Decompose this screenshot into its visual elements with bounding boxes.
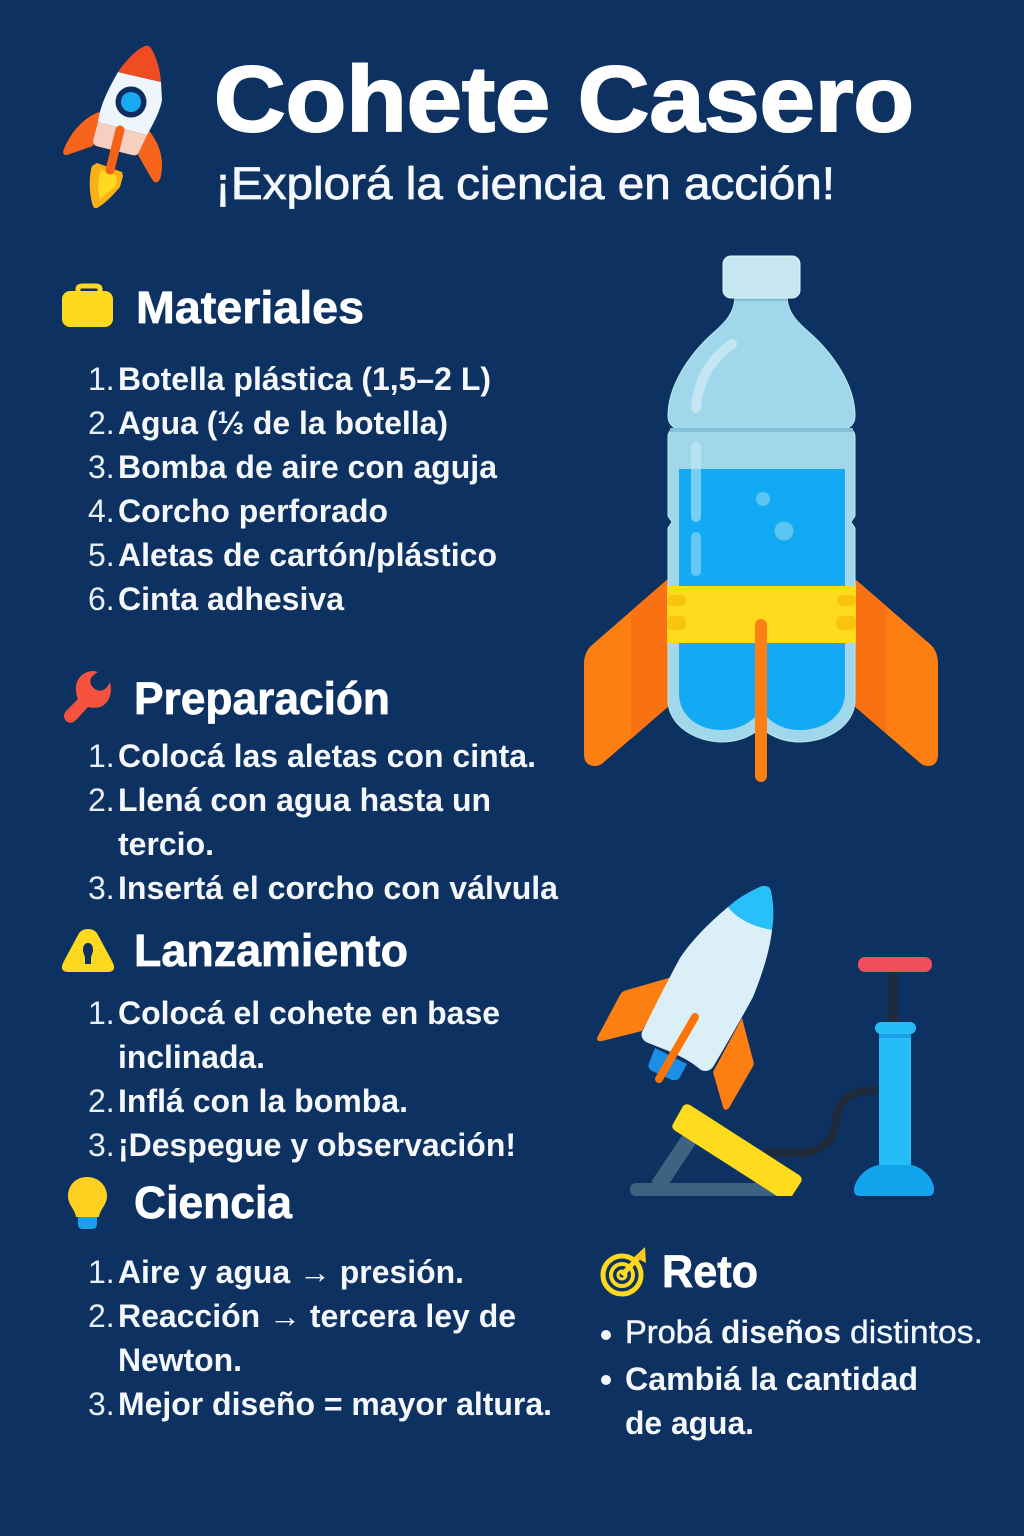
rocket nose [728, 886, 773, 930]
list: preparación: tercio. [118, 826, 214, 862]
list: materiales: Corcho perforado [118, 493, 388, 529]
list: materiales: Agua (⅓ de la botella) [118, 405, 448, 441]
subtitle: ¡Explorá la ciencia en acción! [215, 158, 835, 209]
list: preparación: Colocá las aletas con cinta. [118, 738, 536, 774]
list: preparación: 1. [88, 738, 115, 774]
list: lanzamiento: ¡Despegue y observación! [118, 1127, 516, 1163]
icon: wrench [64, 671, 111, 723]
list: materiales: Botella plástica (1,5–2 L) [118, 361, 491, 397]
icon: header rocket [63, 46, 162, 208]
list: preparación [88, 738, 558, 906]
air hose [765, 1090, 878, 1153]
list: materiales: 6. [88, 581, 115, 617]
rocket rod [659, 1017, 695, 1079]
list: reto: Probá [625, 1314, 712, 1350]
stand [630, 1138, 782, 1196]
rocket body [642, 907, 772, 1071]
list: materiales: 1. [88, 361, 115, 397]
list: lanzamiento: 2. [88, 1083, 115, 1119]
bubbles [756, 492, 794, 540]
heading: Ciencia: Ciencia [134, 1177, 293, 1228]
list: materiales: Aletas de cartón/plástico [118, 537, 497, 573]
yellow tape [667, 586, 856, 643]
list: materiales: 4. [88, 493, 115, 529]
list: lanzamiento: 1. [88, 995, 115, 1031]
right fin [853, 579, 938, 766]
list: ciencia: Aire y agua → presión. [118, 1254, 464, 1290]
launch ramp [672, 1104, 802, 1196]
illustration: bottle rocket [584, 256, 938, 782]
list: reto: diseños [721, 1314, 841, 1350]
rocket fins and nozzle [597, 977, 754, 1110]
list: materiales: Cinta adhesiva [118, 581, 344, 617]
list: preparación: 3. [88, 870, 115, 906]
list: ciencia: 1. [88, 1254, 115, 1290]
list: ciencia: Newton. [118, 1342, 242, 1378]
list: ciencia: 2. [88, 1298, 115, 1334]
list: materiales [88, 361, 497, 617]
list: reto [601, 1314, 983, 1441]
icon: light bulb [68, 1177, 107, 1229]
pump [854, 957, 934, 1196]
heading: Preparación: Preparación [134, 673, 390, 724]
list: materiales: Bomba de aire con aguja [118, 449, 497, 485]
water [679, 469, 845, 730]
list: lanzamiento [88, 995, 516, 1163]
launch rod [755, 619, 767, 782]
bottle cap [723, 256, 800, 298]
list: preparación: Llená con agua hasta un [118, 782, 491, 818]
heading: Reto: Reto [662, 1246, 758, 1297]
list: ciencia [88, 1254, 552, 1422]
list: preparación: Insertá el corcho con válvula [118, 870, 558, 906]
icon: target with arrow [603, 1247, 646, 1294]
list: materiales: 2. [88, 405, 115, 441]
list: ciencia: 3. [88, 1386, 115, 1422]
title: Cohete Casero [214, 47, 914, 151]
list: reto: distintos. [850, 1314, 983, 1350]
list: reto: de agua. [625, 1405, 754, 1441]
icon: briefcase [62, 286, 113, 327]
list: lanzamiento: inclinada. [118, 1039, 265, 1075]
list: reto: Cambiá la cantidad [625, 1361, 918, 1397]
left fin [584, 579, 670, 766]
list: ciencia: Mejor diseño = mayor altura. [118, 1386, 552, 1422]
list: materiales: 3. [88, 449, 115, 485]
list: lanzamiento: 3. [88, 1127, 115, 1163]
bottle highlights [696, 344, 732, 571]
list: materiales: 5. [88, 537, 115, 573]
list: preparación: 2. [88, 782, 115, 818]
heading: Materiales: Materiales [136, 282, 364, 333]
icon: warning triangle [62, 929, 114, 972]
list: lanzamiento: Inflá con la bomba. [118, 1083, 408, 1119]
heading: Lanzamiento: Lanzamiento [134, 925, 408, 976]
bottle body [668, 296, 855, 742]
illustration: launcher with pump [597, 886, 934, 1196]
list: lanzamiento: Colocá el cohete en base [118, 995, 500, 1031]
list: ciencia: Reacción → tercera ley de [118, 1298, 516, 1334]
